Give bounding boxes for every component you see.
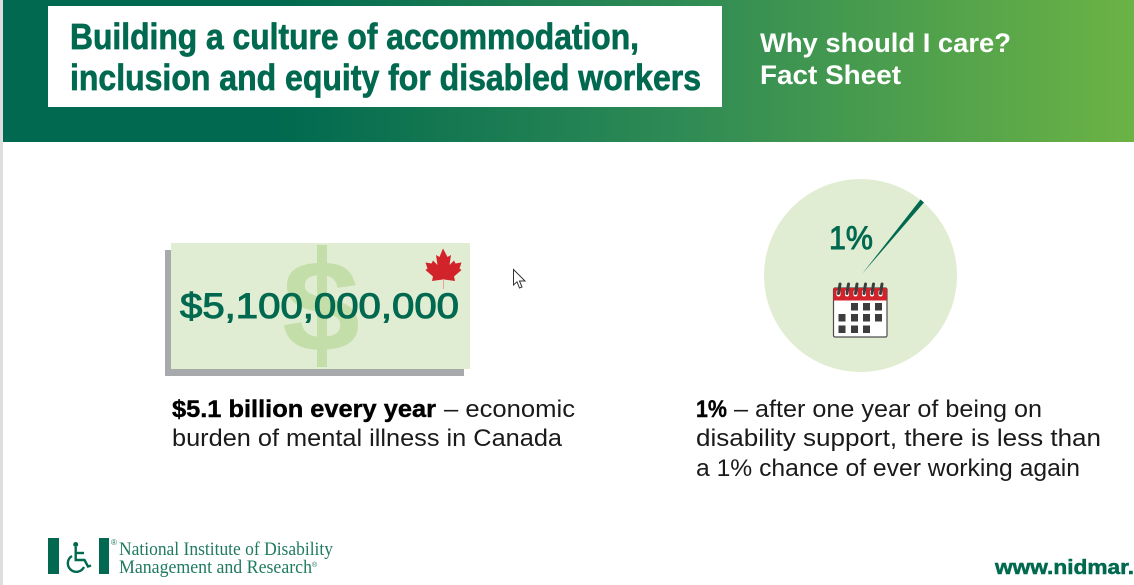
subtitle xyxy=(760,28,1011,90)
organization name: National Institute of Disability xyxy=(119,540,334,560)
icon: calendar xyxy=(834,284,887,337)
organization name: Management and Research xyxy=(119,558,312,578)
title box: inclusion and equity for disabled workers xyxy=(70,57,701,98)
subtitle: Why should I care? xyxy=(760,28,1011,58)
subtitle: Fact Sheet xyxy=(760,60,901,90)
label: 1%: 1% xyxy=(829,220,873,256)
NIDMAR logo xyxy=(48,538,334,578)
organization name: ® xyxy=(111,538,117,547)
text: one percent chance: 1% xyxy=(696,396,727,423)
website url: www.nidmar. xyxy=(994,557,1134,579)
icon: wheelchair xyxy=(48,538,109,574)
text: economic burden: – economic xyxy=(444,396,575,423)
text: economic burden: burden of mental illness in Canada xyxy=(172,425,563,452)
text: one percent chance xyxy=(696,396,1101,482)
organization name: ® xyxy=(312,561,318,569)
organization name xyxy=(111,538,334,578)
text: economic burden xyxy=(172,396,575,452)
text: one percent chance: – after one year of being on xyxy=(734,396,1042,423)
title box xyxy=(48,6,722,107)
text: one percent chance: a 1% chance of ever working again xyxy=(696,455,1080,482)
header banner xyxy=(3,0,1134,142)
text: economic burden: $5.1 billion every year xyxy=(172,396,436,423)
large dollar watermark: $ xyxy=(282,233,360,379)
amount: $5,100,000,000 xyxy=(180,287,459,326)
icon: maple leaf xyxy=(426,248,462,289)
needle slice xyxy=(862,200,924,274)
pie chart: 1 percent xyxy=(764,179,957,372)
title box: Building a culture of accommodation, xyxy=(70,16,639,57)
text: one percent chance: disability support, there is less than xyxy=(696,425,1101,452)
banknote graphic xyxy=(165,233,470,379)
mouse cursor xyxy=(514,270,525,288)
